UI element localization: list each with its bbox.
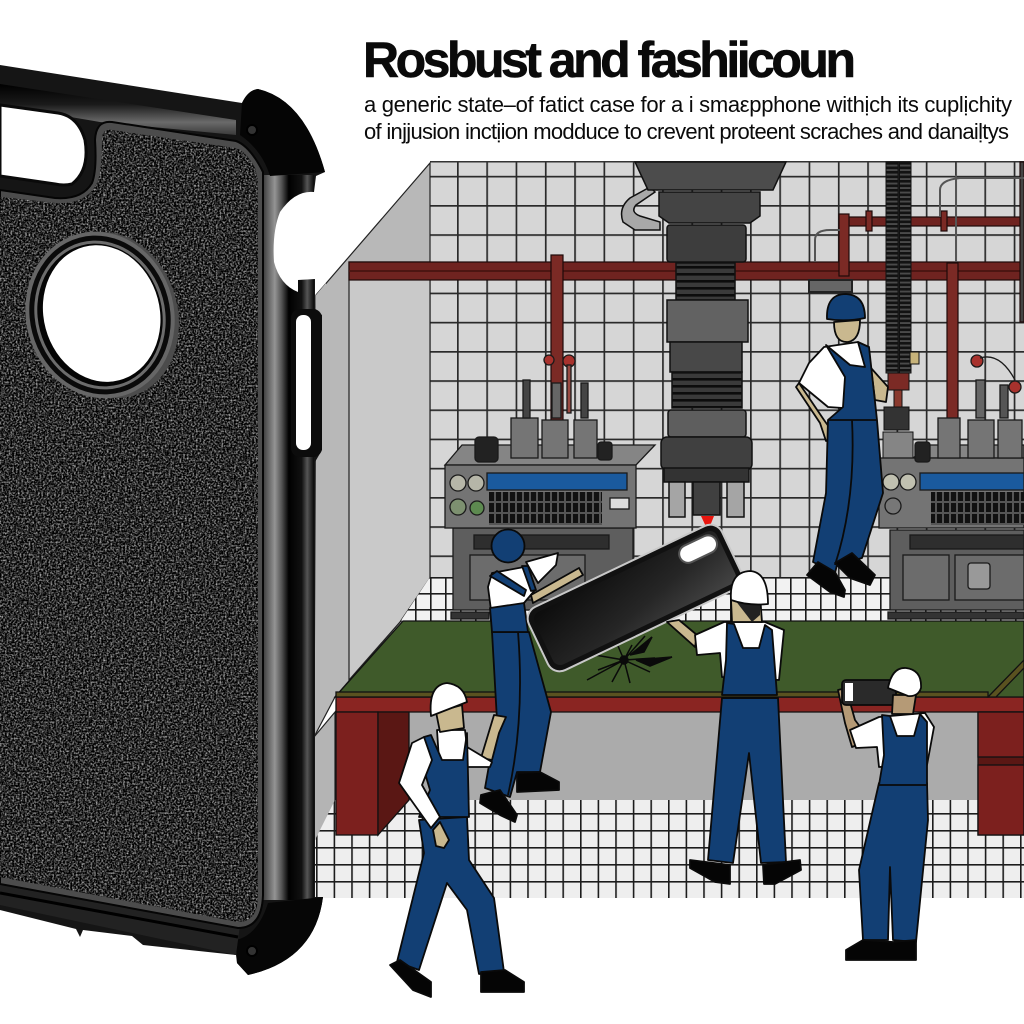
lower floor tiles <box>314 800 1024 898</box>
camera cutout <box>676 532 720 566</box>
rear worker in blue cap <box>796 294 888 597</box>
grey conduit and bracket <box>809 175 1024 292</box>
round logo hole with ring <box>7 215 193 415</box>
subtitle text <box>364 92 1012 144</box>
control knobs <box>450 475 484 515</box>
right moulding machine <box>879 355 1024 619</box>
table top <box>335 621 1024 697</box>
blue control bar <box>920 473 1024 490</box>
subtitle text: of injjusion inctịion modduce to crevent proteent scraches and danaiḷtys <box>364 119 1009 144</box>
table apron <box>336 697 1024 712</box>
blue control bar <box>487 473 627 490</box>
camera cutout <box>0 105 86 185</box>
corner bumper top <box>240 89 325 176</box>
crack in the table <box>587 636 672 683</box>
right side rim <box>258 175 314 900</box>
large phone case product <box>0 65 326 975</box>
left moulding machine <box>445 355 655 619</box>
case outer frame <box>0 65 325 975</box>
left foreground worker walking <box>390 683 524 997</box>
lower cabinet <box>888 530 1024 619</box>
left table leg <box>336 712 409 835</box>
red injection nozzle <box>701 516 714 531</box>
lower cabinet <box>451 528 633 619</box>
left side wall <box>314 163 430 842</box>
inner bezel <box>0 122 263 928</box>
right table drawers <box>978 712 1024 835</box>
top units <box>915 355 1022 462</box>
side button with slot <box>291 309 322 457</box>
held phone case <box>522 519 748 677</box>
small phone <box>842 680 896 705</box>
grey area under table <box>409 712 978 800</box>
red pipes <box>349 162 1024 425</box>
central injection press <box>622 162 786 517</box>
worker holding the case from left <box>480 530 583 822</box>
central worker seen from behind <box>667 571 801 884</box>
top rim highlight <box>0 84 236 135</box>
raised arm <box>838 688 870 747</box>
vertical coil column <box>883 162 919 458</box>
floor tiles behind the table <box>400 577 1024 622</box>
bottom rim highlight <box>0 882 240 955</box>
work table <box>335 621 1024 835</box>
factory room <box>314 161 1024 898</box>
top units <box>475 355 612 462</box>
control knobs <box>883 474 916 514</box>
subtitle text: a generic state–of fatict case for a i smaεpphone withịch its cuplịchity <box>364 92 1012 117</box>
leather texture panel <box>0 120 262 930</box>
right worker photographing with a phone <box>838 668 934 960</box>
white notch in the side <box>274 192 326 292</box>
title: Rosbust and fashiicoun <box>363 32 856 88</box>
back wall tiles <box>430 162 1024 578</box>
corner bumper bottom <box>236 897 323 975</box>
